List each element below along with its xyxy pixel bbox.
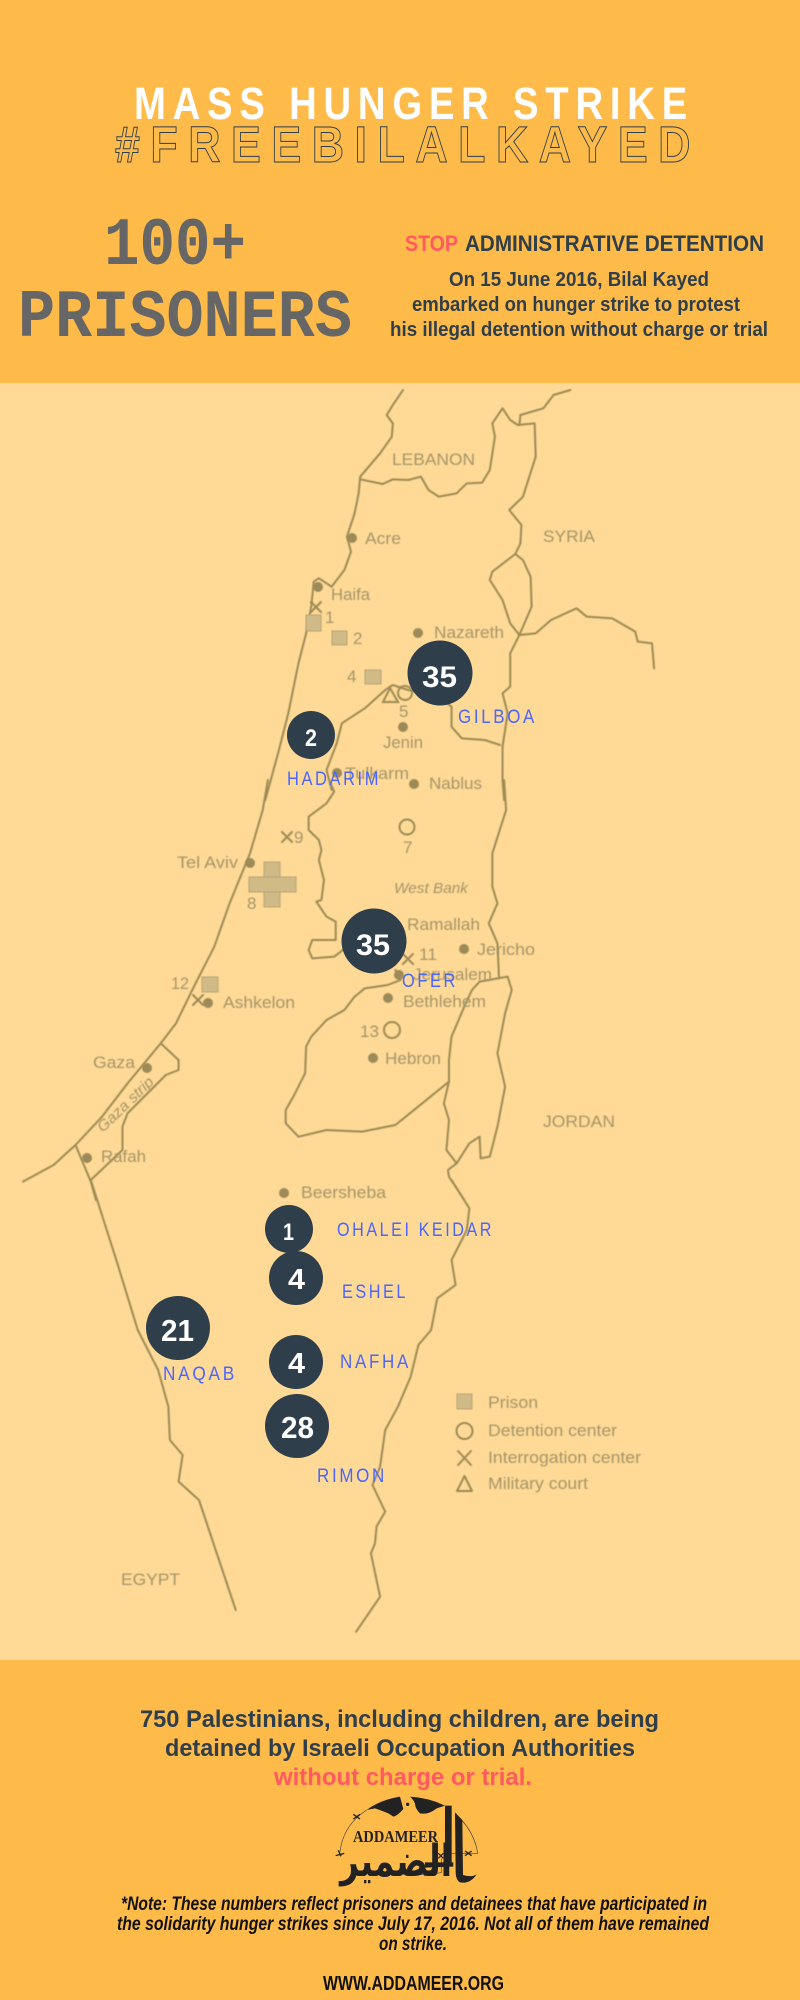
marker: Rimon 28: RIMON	[317, 1466, 387, 1487]
marker: Hadarim 2	[287, 711, 381, 790]
map place labels: Bethlehem	[403, 992, 486, 1011]
map place labels: EGYPT	[121, 1570, 180, 1589]
marker: Nafha 4	[269, 1335, 411, 1389]
panel: footer	[0, 1660, 800, 2000]
legend: Prison	[488, 1393, 538, 1412]
marker: Hadarim 2: HADARIM	[287, 769, 381, 790]
marker: Gilboa 35: GILBOA	[458, 707, 537, 728]
map place labels: Tulkarm	[345, 764, 409, 783]
map place labels: Ashkelon	[223, 993, 295, 1012]
marker: Naqab 21: 21	[161, 1313, 194, 1348]
legend: Interrogation center	[488, 1448, 641, 1467]
map place labels: Beersheba	[301, 1183, 387, 1202]
legend	[456, 1393, 641, 1493]
logo: Addameer: الضمير	[339, 1836, 452, 1887]
map place labels: SYRIA	[543, 527, 596, 546]
map place labels	[93, 450, 615, 1589]
text block: 750 Palestinians	[140, 1706, 659, 1791]
panel: map	[0, 383, 800, 1660]
map place labels: Jericho	[477, 940, 535, 959]
title: MASS HUNGER STRIKE	[134, 78, 694, 129]
marker: Ofer 35: OFER	[402, 971, 458, 992]
marker: Eshel 4: 4	[288, 1264, 305, 1296]
map place labels: 7	[403, 838, 412, 857]
statistic: 100+ prisoners: 100+	[104, 208, 246, 285]
marker: Rimon 28	[265, 1394, 387, 1487]
map place labels: 9	[294, 828, 303, 847]
map symbols: towns, prisons, detention centres	[82, 533, 469, 1198]
map outlines	[23, 390, 654, 1632]
text block: 750 Palestinians: without charge or trial.	[273, 1764, 532, 1791]
map place labels: Nazareth	[434, 623, 504, 642]
map place labels: Gaza	[93, 1053, 136, 1072]
map place labels: 8	[247, 894, 256, 913]
map place labels: West Bank	[394, 880, 470, 897]
map place labels: Ramallah	[407, 915, 480, 934]
marker: Gilboa 35	[408, 640, 537, 728]
map place labels: LEBANON	[392, 450, 475, 469]
map place labels: 2	[353, 629, 362, 648]
marker: Nafha 4: 4	[288, 1348, 305, 1380]
website url: WWW.ADDAMEER.ORG	[323, 1973, 504, 1995]
map place labels: 5	[399, 702, 408, 721]
legend: Military court	[488, 1474, 588, 1493]
marker: Hadarim 2: 2	[305, 725, 317, 752]
marker: Ohalei Keidar 1	[265, 1205, 494, 1253]
text block: 750 Palestinians: 750 Palestinians, including children, are being	[140, 1706, 659, 1733]
marker: Eshel 4: ESHEL	[342, 1282, 408, 1303]
marker: Rimon 28: 28	[281, 1410, 314, 1445]
map place labels: Jenin	[383, 733, 423, 752]
map place labels: 4	[347, 667, 356, 686]
statistic: 100+ prisoners: PRISONERS	[18, 280, 352, 357]
map place labels: Rafah	[101, 1147, 146, 1166]
marker: Naqab 21: NAQAB	[163, 1364, 237, 1385]
marker: Gilboa 35: 35	[422, 661, 457, 694]
map place labels: 11	[419, 945, 437, 964]
map place labels: 13	[360, 1022, 379, 1041]
map place labels: Gaza strip	[94, 1074, 157, 1136]
map place labels: JORDAN	[543, 1112, 615, 1131]
marker: Ofer 35: 35	[356, 929, 390, 962]
marker: Ofer 35	[342, 908, 458, 992]
map place labels: Jerusalem	[413, 965, 492, 984]
panel: header	[0, 0, 800, 383]
text block: stop administrative detention: embarked on hunger strike to protest	[412, 294, 740, 316]
map place labels: Acre	[365, 529, 401, 548]
map place labels: Tel Aviv	[177, 853, 239, 872]
map place labels: 1	[325, 608, 334, 627]
legend: Detention center	[488, 1421, 617, 1440]
text block: stop administrative detention: ADMINISTRATIVE DETENTION	[465, 231, 764, 256]
map place labels: 12	[171, 974, 189, 993]
map place labels: Hebron	[385, 1049, 441, 1068]
marker: Eshel 4	[269, 1251, 408, 1305]
text block: stop administrative detention: On 15 June 2016, Bilal Kayed	[449, 269, 709, 291]
note	[117, 1894, 709, 1955]
statistic: 100+ prisoners	[18, 208, 352, 357]
text block: stop administrative detention	[390, 231, 768, 341]
note: on strike.	[379, 1934, 447, 1955]
map place labels: Haifa	[331, 585, 371, 604]
marker: Ohalei Keidar 1: 1	[283, 1219, 294, 1246]
text block: stop administrative detention: STOP	[405, 231, 458, 256]
marker: Ohalei Keidar 1: OHALEI KEIDAR	[337, 1220, 494, 1241]
marker: Nafha 4: NAFHA	[340, 1352, 411, 1373]
logo: Addameer	[336, 1797, 478, 1887]
map place labels: Nablus	[429, 774, 482, 793]
logo: Addameer: ADDAMEER	[353, 1827, 439, 1846]
marker: Naqab 21	[146, 1296, 237, 1385]
hashtag heading: #FREEBILALKAYED	[115, 116, 701, 173]
text block: stop administrative detention: his illegal detention without charge or trial	[390, 319, 768, 341]
text block: 750 Palestinians: detained by Israeli Occupation Authorities	[165, 1735, 635, 1762]
